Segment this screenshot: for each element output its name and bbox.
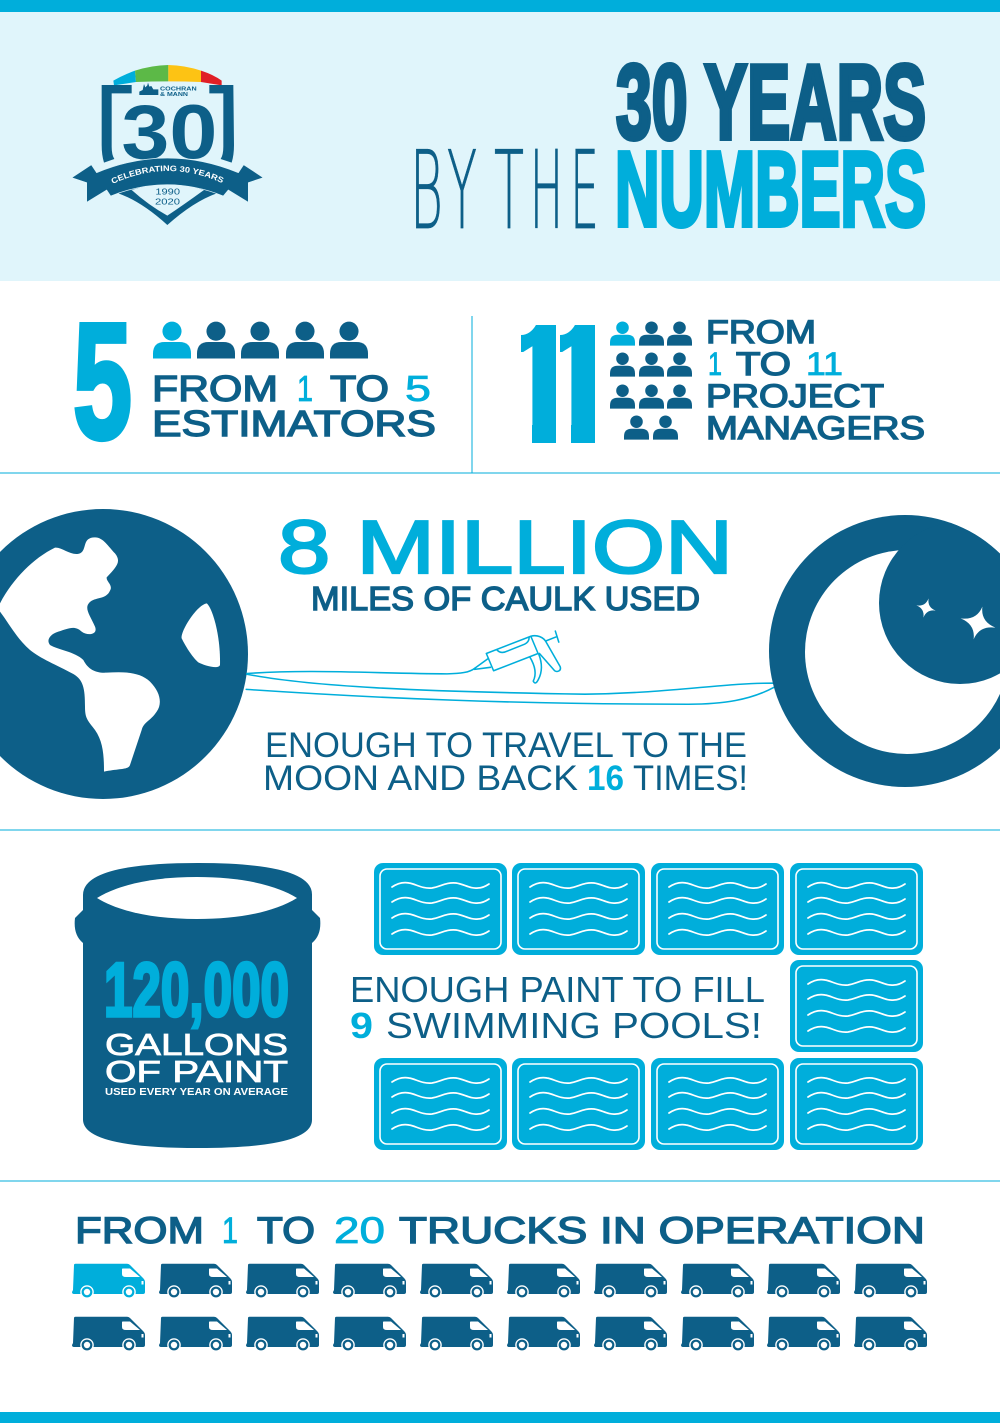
- heading: 8 million: 8 MILLION: [278, 505, 733, 589]
- estimators text: 5: [405, 368, 431, 409]
- project managers text: 11: [806, 346, 843, 382]
- caption: moon and back: TIMES!: [633, 759, 748, 798]
- stat: estimators: [73, 289, 436, 473]
- top bar: [0, 0, 1000, 12]
- caption: moon and back: MOON AND BACK: [263, 759, 578, 798]
- logo: 30th anniversary badge: 2020: [155, 197, 181, 206]
- title: by the: B: [410, 129, 443, 254]
- caption: swimming pools: [350, 969, 765, 1046]
- title: [410, 44, 926, 254]
- project managers text: PROJECT: [706, 378, 884, 414]
- project managers text: [706, 314, 925, 446]
- heading: 8 million: [278, 505, 733, 617]
- project managers text: 1: [708, 346, 722, 382]
- estimator icons: [153, 322, 368, 359]
- icon: paint bucket: OF PAINT: [105, 1054, 288, 1089]
- logo: 30th anniversary badge: CELEBRATING 30 YEARS: [112, 165, 224, 183]
- logo: 30th anniversary badge: & MANN: [160, 92, 188, 98]
- bottom bar: [0, 1412, 1000, 1423]
- swimming pools: [374, 863, 923, 1150]
- stat: project managers: [521, 320, 924, 443]
- icon: stars: [914, 596, 1000, 644]
- caption: moon and back: ENOUGH TO TRAVEL TO THE: [265, 726, 747, 765]
- logo: 30th anniversary badge: [72, 65, 262, 225]
- icon: paint bucket: 120,000: [104, 948, 289, 1033]
- project manager icons: [610, 321, 692, 440]
- icon: paint bucket: GALLONS: [105, 1027, 288, 1062]
- estimators text: ESTIMATORS: [152, 403, 436, 444]
- stat: estimators: 5: [73, 289, 132, 473]
- number: 11: 1: [493, 289, 588, 480]
- title: by the: [410, 129, 599, 254]
- caption: swimming pools: ENOUGH PAINT TO FILL: [350, 969, 765, 1010]
- caulk gun and bead lines: [246, 631, 775, 704]
- icon: earth: [0, 509, 248, 799]
- project managers text: FROM: [706, 314, 816, 350]
- title: by the: Y: [447, 129, 477, 254]
- heading: 8 million: MILES OF CAULK USED: [311, 580, 700, 617]
- heading: trucks: 1: [222, 1210, 238, 1251]
- icon: paint bucket: [75, 863, 320, 1148]
- estimators text: FROM: [152, 368, 278, 409]
- number: 11: [521, 325, 595, 443]
- icon: moon: [769, 515, 1000, 787]
- title: E: [570, 129, 599, 254]
- heading: trucks: 20: [334, 1210, 385, 1251]
- caption: swimming pools: SWIMMING POOLS!: [386, 1005, 762, 1046]
- heading: trucks: TO: [257, 1210, 315, 1251]
- caption: moon and back: 16: [587, 759, 624, 798]
- number: 11: 1: [532, 289, 627, 480]
- caption: moon and back: [263, 726, 748, 798]
- estimators text: [152, 368, 436, 444]
- estimators text: TO: [330, 368, 389, 409]
- heading: trucks: [75, 1210, 925, 1251]
- estimators text: 1: [297, 368, 313, 409]
- trucks grid: [72, 1264, 927, 1352]
- title: by the: T: [494, 129, 524, 254]
- title: by the: H: [530, 129, 563, 254]
- logo: 30th anniversary badge: 1990: [155, 187, 181, 196]
- project managers text: MANAGERS: [706, 410, 925, 446]
- heading: trucks: TRUCKS IN OPERATION: [399, 1210, 925, 1251]
- header band: [0, 12, 1000, 281]
- logo: 30th anniversary badge: COCHRAN: [160, 87, 197, 93]
- heading: trucks: FROM: [75, 1210, 204, 1251]
- project managers text: TO: [736, 346, 791, 382]
- logo: 30th anniversary badge: 30: [121, 89, 217, 175]
- caption: swimming pools: 9: [350, 1005, 373, 1046]
- icon: paint bucket: USED EVERY YEAR ON AVERAGE: [105, 1086, 288, 1098]
